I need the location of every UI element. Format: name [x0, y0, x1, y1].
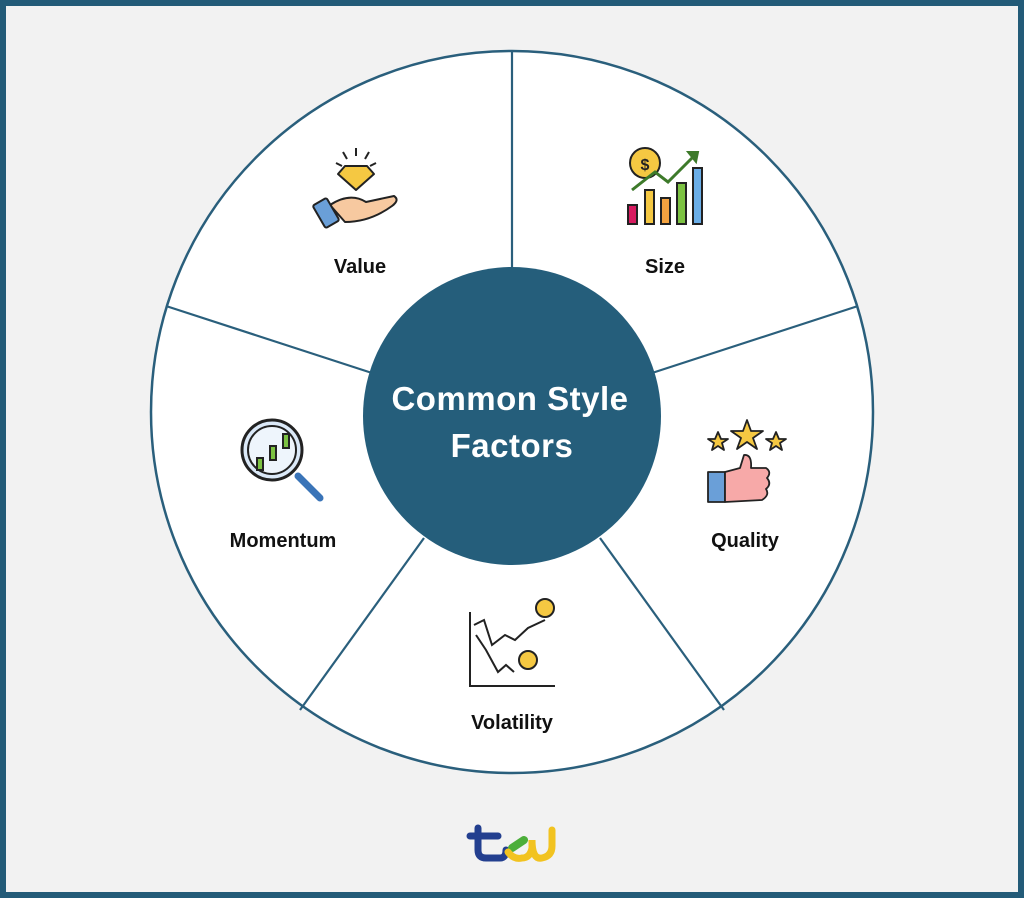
center circle: title: Factors	[451, 427, 573, 464]
segment: Size	[628, 148, 702, 278]
segment: Momentum	[230, 420, 336, 552]
segment: Quality	[708, 420, 786, 552]
segment: Size: Size	[645, 256, 685, 278]
icon: bar chart with coin: $	[641, 157, 650, 174]
center circle: title	[363, 267, 661, 565]
center circle: title: Common Style	[391, 380, 629, 417]
wheel	[151, 51, 873, 773]
segment: Quality: Quality	[711, 530, 780, 552]
segment: Volatility	[470, 599, 555, 734]
segment: Momentum: Momentum	[230, 530, 336, 552]
icon: volatile line chart	[470, 599, 555, 686]
icon: thumbs up with stars	[708, 420, 786, 502]
icon: diamond in hand	[313, 148, 397, 228]
icon: magnifier with candlesticks	[242, 420, 320, 498]
logo: tej	[470, 828, 552, 858]
segment: Volatility: Volatility	[471, 712, 554, 734]
segment: Value	[313, 148, 397, 278]
segment: Value: Value	[334, 256, 386, 278]
